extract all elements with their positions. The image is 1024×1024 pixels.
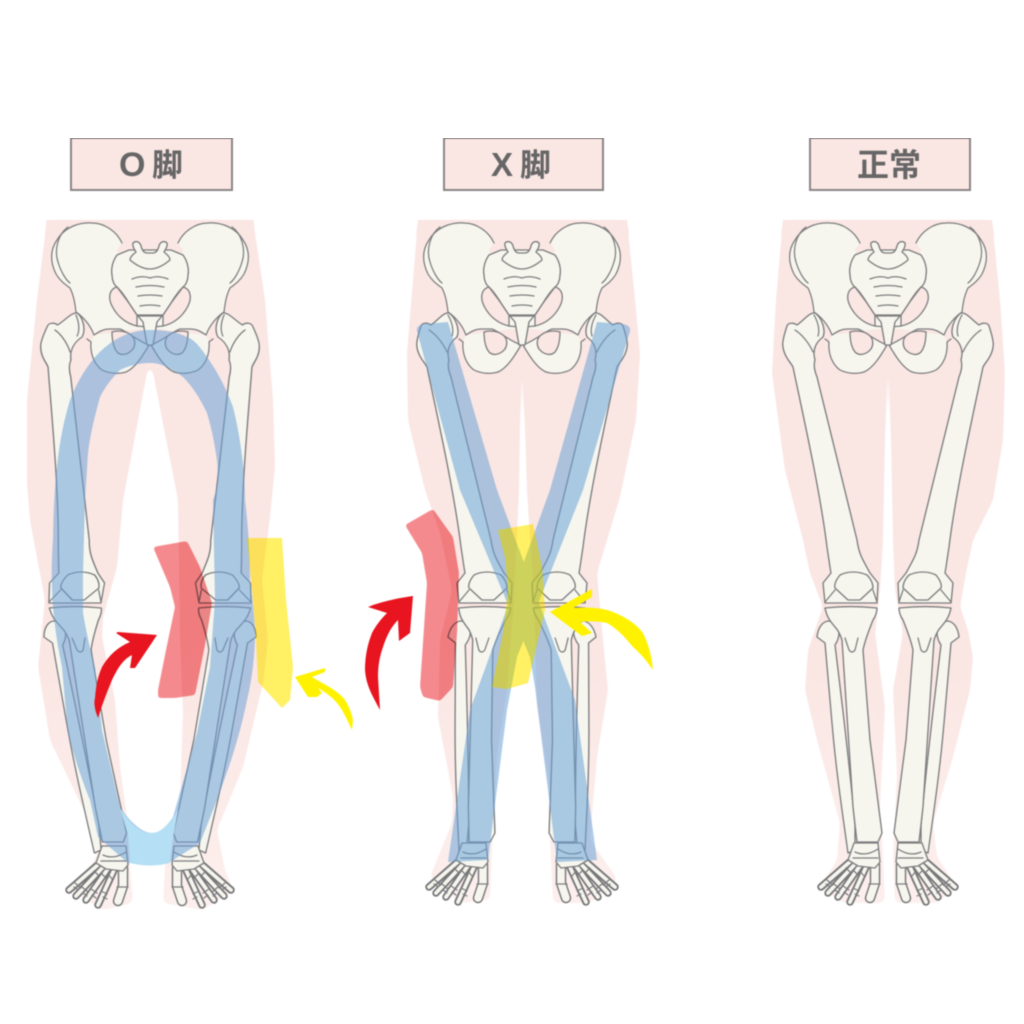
label box: X脚: 脚: [520, 148, 551, 183]
yellow knee shape: [492, 524, 545, 689]
yellow arrow: [295, 668, 353, 730]
figure: normal legs: [772, 220, 1005, 903]
label box: X脚: X: [491, 146, 513, 183]
label box: 正常: 正常: [857, 147, 921, 183]
light blue patch between ankles: [120, 808, 178, 866]
red arrow: [365, 596, 413, 710]
blue X-shaped alignment bands: [417, 322, 630, 862]
body silhouette: X-legs: [407, 220, 640, 903]
figure: O-legs: [7, 220, 353, 910]
diagram: three leg alignments: [7, 138, 1005, 910]
label box: 正常: [810, 138, 970, 190]
blue O-shaped alignment band: [52, 330, 255, 863]
skeleton: O-legs: [7, 223, 293, 905]
red outer shape: [405, 509, 459, 701]
body silhouette: normal: [772, 220, 1005, 903]
red bowed shape: [153, 541, 212, 698]
label box: X脚: [444, 138, 603, 190]
label box: O脚: O: [119, 146, 145, 184]
skeleton: normal: [783, 223, 993, 902]
body silhouette: O-legs: [27, 220, 275, 910]
red arrow: [94, 632, 157, 718]
label box: O脚: [71, 138, 232, 190]
label box: O脚: 脚: [152, 148, 183, 183]
figure: X-legs: [365, 220, 653, 903]
yellow outer shape: [247, 538, 293, 708]
yellow arrow: [550, 589, 653, 670]
skeleton: X-legs: [417, 223, 627, 902]
